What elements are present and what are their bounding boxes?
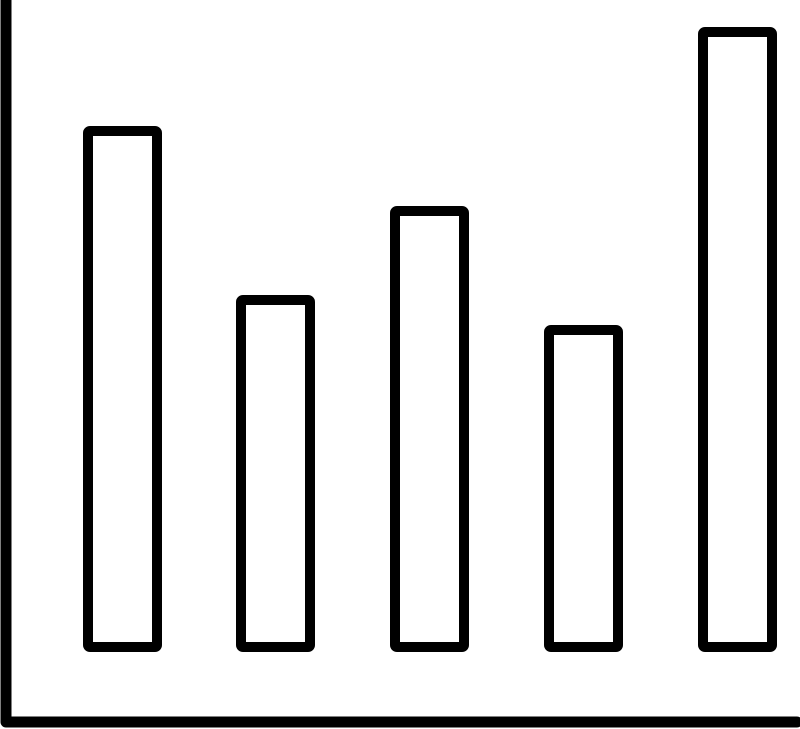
- bars: [88, 32, 772, 647]
- bar 1: [88, 131, 157, 647]
- bar 4: [549, 330, 618, 647]
- bar 3: [395, 211, 464, 647]
- bar 2: [241, 300, 310, 647]
- bar 5: [703, 32, 772, 647]
